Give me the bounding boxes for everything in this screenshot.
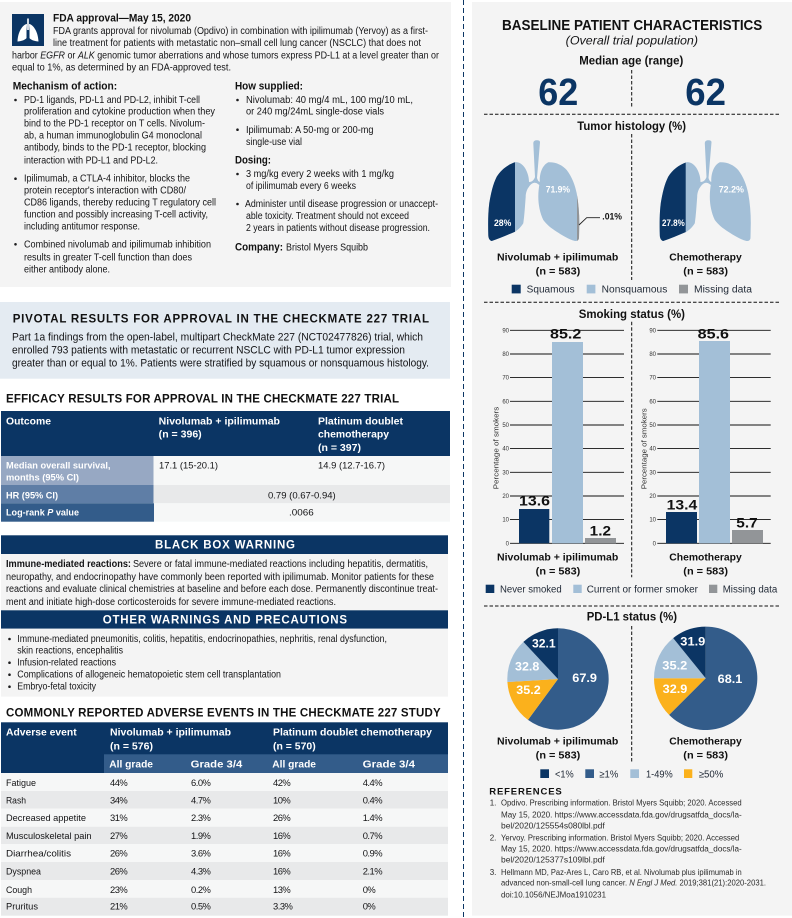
heading: other warnings: OTHER WARNINGS AND PRECAUTIONS: [103, 615, 347, 627]
text block: references: Yervoy. Prescribing information. Bristol Myers Squibb; 2020. Accessed: [501, 834, 739, 843]
table: adverse events: 0.2%: [191, 884, 211, 895]
legend: smoking: Never smoked: [500, 584, 562, 595]
text block: how supplied: [235, 81, 413, 148]
pie chart: PD-L1 nivolumab + ipilimumab: 32.1: [532, 637, 556, 651]
section: median age: [538, 55, 726, 114]
bar chart: smoking nivolumab + ipilimumab: 13.6: [519, 494, 551, 509]
text block: mechanism of action: function and possibly increasing T-cell activity,: [24, 210, 208, 221]
table: adverse events: 16%: [273, 866, 290, 877]
bar chart: smoking nivolumab + ipilimumab: 85.2: [550, 327, 581, 342]
panel: black box warning: [1, 535, 448, 610]
text block: mechanism of action: interaction with PD-L1 and PD-L2.: [24, 155, 158, 166]
labels: histology arms: Chemotherapy: [669, 252, 742, 264]
icon: lungs: [12, 14, 44, 46]
text block: references: May 15, 2020. https://www.accessdata.fda.gov/drugsatfda_docs/la-: [501, 844, 742, 853]
text block: approval description: [12, 26, 440, 74]
legend: PD-L1: <1%: [555, 769, 574, 780]
bar chart: smoking chemotherapy: 0: [653, 541, 657, 547]
bar chart: smoking chemotherapy: 13.4: [667, 498, 698, 513]
labels: smoking arms: (n = 583): [536, 566, 580, 578]
labels: histology arms: (n = 583): [683, 265, 728, 277]
table: adverse events: 26%: [110, 866, 127, 877]
legend: smoking: [486, 584, 778, 595]
bar chart: smoking chemotherapy: 5.7: [736, 516, 758, 531]
heading: black box warning: BLACK BOX WARNING: [155, 540, 295, 552]
text block: dosing: [235, 154, 438, 234]
table: efficacy results: (n = 397): [318, 442, 361, 454]
text block: approval description: harbor EGFR or ALK genomic tumor aberrations and whose tumors express PD-L1 at a level greater than or: [12, 51, 440, 62]
text block: immune-mediated reactions: ment and initiate high-dose corticosteroids for severe immune-mediated reactions.: [6, 597, 336, 608]
text block: dosing: Dosing:: [235, 154, 271, 166]
table: adverse events: 31%: [110, 812, 127, 823]
table: adverse events: 3.3%: [273, 901, 293, 912]
pie chart: PD-L1 chemotherapy: 35.2: [662, 659, 688, 673]
table: adverse events: 4.3%: [191, 866, 211, 877]
list: precautions: Infusion-related reactions: [17, 658, 116, 669]
bar chart: smoking nivolumab + ipilimumab: 10: [502, 518, 510, 524]
section: median age: Median age (range): [579, 55, 683, 67]
text block: trial description: greater than or equal to 1%. Patients were stratified by squamous or nonsquamous histology.: [12, 358, 429, 370]
bar chart: smoking nivolumab + ipilimumab: 30: [502, 470, 510, 476]
table: adverse events: 3.6%: [191, 848, 211, 859]
legend: histology: [512, 285, 752, 296]
text block: immune-mediated reactions: [6, 559, 438, 608]
labels: smoking arms: [497, 552, 742, 578]
table: efficacy results: .0066: [289, 507, 314, 518]
text block: approval description: FDA grants approval for nivolumab (Opdivo) in combination with ipilimumab (Yervoy) as a first-: [53, 26, 428, 37]
chart: lung nivolumab + ipilimumab: [488, 140, 622, 241]
table: adverse events: Decreased appetite: [6, 812, 86, 823]
chart: lung nivolumab + ipilimumab: 71.9%: [546, 184, 570, 195]
section: median age: 62: [538, 72, 578, 114]
panel: FDA approval summary: [0, 2, 451, 287]
bar chart: smoking chemotherapy: 85.6: [698, 327, 730, 342]
labels: histology arms: Nivolumab + ipilimumab: [497, 252, 618, 264]
labels: PD-L1 arms: (n = 583): [683, 750, 728, 762]
table: adverse events: Diarrhea/colitis: [6, 848, 71, 859]
table: adverse events: 21%: [110, 901, 127, 912]
pie chart: PD-L1 chemotherapy: 32.9: [663, 682, 688, 696]
labels: smoking arms: Nivolumab + ipilimumab: [497, 552, 618, 564]
table: adverse events: 16%: [273, 830, 290, 841]
table: efficacy results: HR (95% CI): [6, 491, 58, 502]
pie chart: PD-L1 nivolumab + ipilimumab: 32.8: [515, 659, 540, 673]
text block: how supplied: Ipilimumab: A 50-mg or 200-mg: [246, 125, 374, 136]
table: efficacy results: chemotherapy: [318, 429, 389, 441]
bar chart: smoking chemotherapy: 80: [649, 352, 657, 358]
text block: mechanism of action: protein receptor's interaction with CD80/: [24, 186, 186, 197]
chart: lung chemotherapy: 72.2%: [719, 184, 745, 195]
heading: adverse events: COMMONLY REPORTED ADVERSE EVENTS IN THE CHECKMATE 227 STUDY: [6, 708, 441, 720]
table: adverse events: Cough: [6, 884, 32, 895]
legend: histology: Nonsquamous: [602, 285, 667, 296]
table: adverse events: All grade: [109, 759, 153, 771]
text block: references: 1.: [490, 799, 496, 808]
text block: mechanism of action: CD86 ligands, thereby reducing T regulatory cell: [24, 198, 216, 209]
table: adverse events: 26%: [110, 848, 127, 859]
legend: PD-L1: ≥1%: [599, 769, 618, 780]
text block: references: 3.: [490, 868, 496, 877]
pie chart: PD-L1 nivolumab + ipilimumab: [507, 628, 609, 730]
table: efficacy results: (n = 396): [159, 429, 202, 441]
table: adverse events: 0.7%: [363, 830, 382, 841]
legend: PD-L1: 1-49%: [646, 769, 673, 780]
text block: mechanism of action: including antitumor response.: [24, 222, 140, 233]
table: adverse events: Nivolumab + ipilimumab: [110, 727, 231, 739]
table: adverse events: (n = 576): [110, 740, 153, 752]
table: efficacy results: 17.1 (15-20.1): [159, 459, 218, 470]
text block: mechanism of action: PD-1 ligands, PD-L1 and PD-L2, inhibit T-cell: [24, 95, 200, 106]
chart: lung chemotherapy: 27.8%: [662, 218, 685, 229]
heading: FDA approval date: FDA approval—May 15, 2020: [53, 13, 191, 25]
bar chart: smoking nivolumab + ipilimumab: 60: [502, 399, 510, 405]
bar chart: smoking chemotherapy: [640, 327, 771, 547]
text block: mechanism of action: Combined nivolumab and ipilimumab inhibition: [24, 240, 211, 251]
bar chart: smoking chemotherapy: 60: [649, 399, 657, 405]
pie chart: PD-L1 chemotherapy: 68.1: [718, 672, 743, 686]
table: adverse events: 23%: [110, 884, 127, 895]
table: adverse events: 27%: [110, 830, 127, 841]
section: smoking status: Smoking status (%): [579, 309, 685, 321]
table: adverse events: 10%: [273, 795, 290, 806]
table: adverse events: 0%: [363, 884, 375, 895]
labels: PD-L1 arms: Chemotherapy: [669, 736, 742, 748]
table: efficacy results: Outcome: [6, 415, 51, 427]
table: adverse events: 2.1%: [363, 866, 382, 877]
bar chart: smoking nivolumab + ipilimumab: 1.2: [590, 524, 611, 539]
section: tumor histology: [480, 121, 756, 296]
labels: PD-L1 arms: [497, 736, 742, 762]
labels: histology arms: [497, 252, 742, 277]
legend: histology: Squamous: [527, 285, 575, 296]
text block: references: Opdivo. Prescribing information. Bristol Myers Squibb; 2020. Accessed: [501, 799, 742, 808]
text block: trial description: enrolled 793 patients with metastatic or recurrent NSCLC with PD-L1 tumor expression: [12, 345, 405, 357]
table: adverse events: 0.4%: [363, 795, 382, 806]
table: adverse events: Pruritus: [6, 901, 38, 912]
legend: smoking: Current or former smoker: [587, 584, 699, 595]
list: precautions: Embryo-fetal toxicity: [17, 682, 96, 693]
text block: references: 2.: [490, 834, 496, 843]
chart: lung nivolumab + ipilimumab: 28%: [494, 218, 512, 229]
text block: references: bel/2020/125377s109lbl.pdf: [501, 856, 606, 865]
table: efficacy results: 14.9 (12.7-16.7): [318, 459, 385, 470]
bar chart: smoking chemotherapy: 90: [649, 328, 657, 334]
heading: baseline characteristics: (Overall trial population): [566, 34, 698, 48]
pie chart: PD-L1 chemotherapy: [654, 627, 757, 730]
text block: mechanism of action: ab, a human immunoglobulin G4 monoclonal: [24, 131, 202, 142]
bar chart: smoking chemotherapy: 30: [649, 470, 657, 476]
bar chart: smoking nivolumab + ipilimumab: 40: [502, 447, 510, 453]
table: adverse events: [1, 722, 448, 916]
table: adverse events: 0.5%: [191, 901, 211, 912]
section: median age: 62: [685, 72, 726, 114]
legend: PD-L1: ≥50%: [699, 769, 723, 780]
labels: smoking arms: Chemotherapy: [669, 552, 742, 564]
table: adverse events: Rash: [6, 795, 26, 806]
text block: how supplied: or 240 mg/24mL single-dose vials: [246, 107, 384, 118]
text block: mechanism of action: Ipilimumab, a CTLA-4 inhibitor, blocks the: [24, 174, 190, 185]
bar chart: smoking chemotherapy: 70: [649, 376, 657, 382]
section: PD-L1 status: PD-L1 status (%): [587, 612, 677, 624]
text block: company: [235, 242, 368, 254]
bar chart: smoking chemotherapy: 50: [649, 423, 657, 429]
table: adverse events: All grade: [272, 759, 316, 771]
text block: mechanism of action: bind to the PD-1 receptor on T cells. Nivolum-: [24, 119, 205, 130]
pie chart: PD-L1 nivolumab + ipilimumab: 67.9: [572, 671, 597, 685]
text block: references: May 15, 2020. https://www.accessdata.fda.gov/drugsatfda_docs/la-: [501, 810, 742, 819]
bar chart: smoking chemotherapy: Percentage of smokers: [640, 408, 649, 489]
heading: efficacy results: EFFICACY RESULTS FOR APPROVAL IN THE CHECKMATE 227 TRIAL: [6, 394, 399, 406]
text block: how supplied: single-use vial: [246, 137, 302, 148]
bar chart: smoking nivolumab + ipilimumab: 90: [502, 328, 510, 334]
table: efficacy results: [1, 411, 450, 522]
panel: baseline patient characteristics: [472, 2, 792, 916]
bar chart: smoking nivolumab + ipilimumab: 70: [502, 376, 510, 382]
table: adverse events: Dyspnea: [6, 866, 42, 877]
list: precautions: Immune-mediated pneumonitis, colitis, hepatitis, endocrinopathies, nephritis, renal dysfunction,: [17, 634, 387, 645]
legend: smoking: Missing data: [723, 584, 778, 595]
panel: pivotal results: [0, 302, 450, 379]
table: efficacy results: Nivolumab + ipilimumab: [159, 415, 280, 427]
heading: pivotal results: PIVOTAL RESULTS FOR APPROVAL IN THE CHECKMATE 227 TRIAL: [13, 314, 429, 326]
table: efficacy results: Platinum doublet: [318, 415, 403, 427]
text block: dosing: 3 mg/kg every 2 weeks with 1 mg/kg: [246, 169, 394, 180]
table: efficacy results: 0.79 (0.67-0.94): [268, 490, 336, 501]
list: precautions: skin reactions, encephalitis: [17, 646, 123, 657]
text block: dosing: of ipilimumab every 6 weeks: [246, 181, 356, 192]
text block: trial description: Part 1a findings from the open-label, multipart CheckMate 227 (NCT02477826) trial, which: [12, 332, 423, 344]
labels: smoking arms: (n = 583): [683, 566, 728, 578]
text block: mechanism of action: either antibody alone.: [24, 265, 110, 276]
text block: dosing: 2 years in patients without disease progression.: [246, 223, 430, 234]
table: adverse events: 34%: [110, 795, 127, 806]
text block: dosing: able toxicity. Treatment should not exceed: [246, 211, 409, 222]
labels: PD-L1 arms: (n = 583): [536, 750, 580, 762]
bar chart: smoking nivolumab + ipilimumab: 20: [502, 494, 510, 500]
text block: how supplied: How supplied:: [235, 81, 303, 93]
text block: immune-mediated reactions: Severe or fatal immune-mediated reactions including hepatitis, dermatitis,: [133, 559, 428, 570]
bar chart: smoking nivolumab + ipilimumab: Percentage of smokers: [491, 406, 500, 489]
text block: immune-mediated reactions: reactions and evaluate clinical chemistries at baseline and before each dose. Permanently discontinue treat-: [6, 584, 438, 595]
table: adverse events: 0%: [363, 901, 375, 912]
text block: company: Bristol Myers Squibb: [286, 243, 368, 254]
table: adverse events: (n = 570): [273, 740, 316, 752]
text block: mechanism of action: Mechanism of action:: [13, 81, 117, 93]
labels: PD-L1 arms: Nivolumab + ipilimumab: [497, 736, 618, 748]
bar chart: smoking nivolumab + ipilimumab: 80: [502, 352, 510, 358]
pie chart: PD-L1 nivolumab + ipilimumab: 35.2: [516, 683, 541, 697]
bar chart: smoking chemotherapy: 20: [649, 494, 657, 500]
text block: mechanism of action: antibody, binds to the PD-1 receptor, blocking: [24, 143, 206, 154]
table: adverse events: Musculoskeletal pain: [6, 830, 92, 841]
table: adverse events: 1.4%: [363, 812, 382, 823]
pie chart: PD-L1 chemotherapy: 31.9: [680, 635, 706, 649]
text block: references: [489, 787, 766, 899]
bar chart: smoking nivolumab + ipilimumab: 0: [506, 541, 510, 547]
text block: references: advanced non-small-cell lung cancer. N Engl J Med. 2019;381(21):2020-2031.: [501, 879, 766, 888]
table: adverse events: 2.3%: [191, 812, 211, 823]
text block: immune-mediated reactions: neuropathy, and endocrinopathy have commonly been reported with ipilimumab. Monitor patients for these: [6, 572, 434, 583]
table: efficacy results: months (95% CI): [6, 473, 79, 484]
text block: approval description: equal to 1%, as determined by an FDA-approved test.: [12, 63, 231, 74]
text block: company: Company:: [235, 242, 283, 254]
table: adverse events: Fatigue: [6, 777, 36, 788]
bar chart: smoking nivolumab + ipilimumab: [491, 327, 624, 547]
legend: PD-L1: [540, 769, 723, 780]
text block: mechanism of action: results in greater T-cell function than does: [24, 252, 192, 263]
text block: references: Hellmann MD, Paz-Ares L, Caro RB, et al. Nivolumab plus ipilimumab in: [501, 868, 742, 877]
table: adverse events: Platinum doublet chemotherapy: [273, 727, 432, 739]
text block: immune-mediated reactions: Immune-mediated reactions:: [6, 559, 131, 570]
text block: trial description: [12, 332, 429, 370]
text block: references: doi:10.1056/NEJMoa1910231: [501, 890, 607, 899]
list: precautions: Complications of allogeneic hematopoietic stem cell transplantation: [17, 670, 281, 681]
table: adverse events: 13%: [273, 884, 290, 895]
table: adverse events: 6.0%: [191, 777, 211, 788]
table: adverse events: 44%: [110, 777, 127, 788]
table: adverse events: Grade 3/4: [363, 759, 415, 771]
list: precautions: [8, 634, 387, 693]
panel: other warnings and precautions: [1, 610, 448, 697]
table: adverse events: 26%: [273, 812, 290, 823]
legend: histology: Missing data: [694, 285, 752, 296]
table: adverse events: Grade 3/4: [191, 759, 242, 771]
labels: histology arms: (n = 583): [536, 265, 580, 277]
section: tumor histology: Tumor histology (%): [577, 121, 686, 133]
table: adverse events: 16%: [273, 848, 290, 859]
text block: how supplied: Nivolumab: 40 mg/4 mL, 100 mg/10 mL,: [246, 95, 413, 106]
table: efficacy results: Log-rank P value: [6, 508, 79, 519]
table: adverse events: 1.9%: [191, 830, 211, 841]
table: adverse events: 0.9%: [363, 848, 382, 859]
text block: references: bel/2020/125554s080lbl.pdf: [501, 821, 606, 830]
table: adverse events: 4.7%: [191, 795, 211, 806]
table: efficacy results: Median overall survival,: [6, 460, 111, 471]
chart: lung chemotherapy: [660, 140, 751, 241]
chart: lung nivolumab + ipilimumab: .01%: [602, 211, 623, 222]
text block: mechanism of action: [13, 81, 216, 276]
text block: references: REFERENCES: [489, 787, 562, 798]
text block: dosing: Administer until disease progression or unaccept-: [245, 199, 438, 210]
text block: mechanism of action: proliferation and cytokine production when they: [24, 107, 215, 118]
section: smoking status: [486, 309, 778, 595]
table: adverse events: Adverse event: [6, 727, 77, 739]
text block: approval description: line treatment for patients with metastatic non–small cell lung cancer (NSCLC) that does not: [53, 38, 421, 49]
bar chart: smoking chemotherapy: 40: [649, 447, 657, 453]
section: PD-L1 status: [497, 612, 757, 780]
heading: baseline characteristics: [502, 17, 762, 48]
heading: baseline characteristics: BASELINE PATIENT CHARACTERISTICS: [502, 17, 762, 34]
bar chart: smoking chemotherapy: 10: [649, 518, 657, 524]
table: adverse events: 42%: [273, 777, 290, 788]
table: adverse events: 4.4%: [363, 777, 382, 788]
bar chart: smoking nivolumab + ipilimumab: 50: [502, 423, 510, 429]
